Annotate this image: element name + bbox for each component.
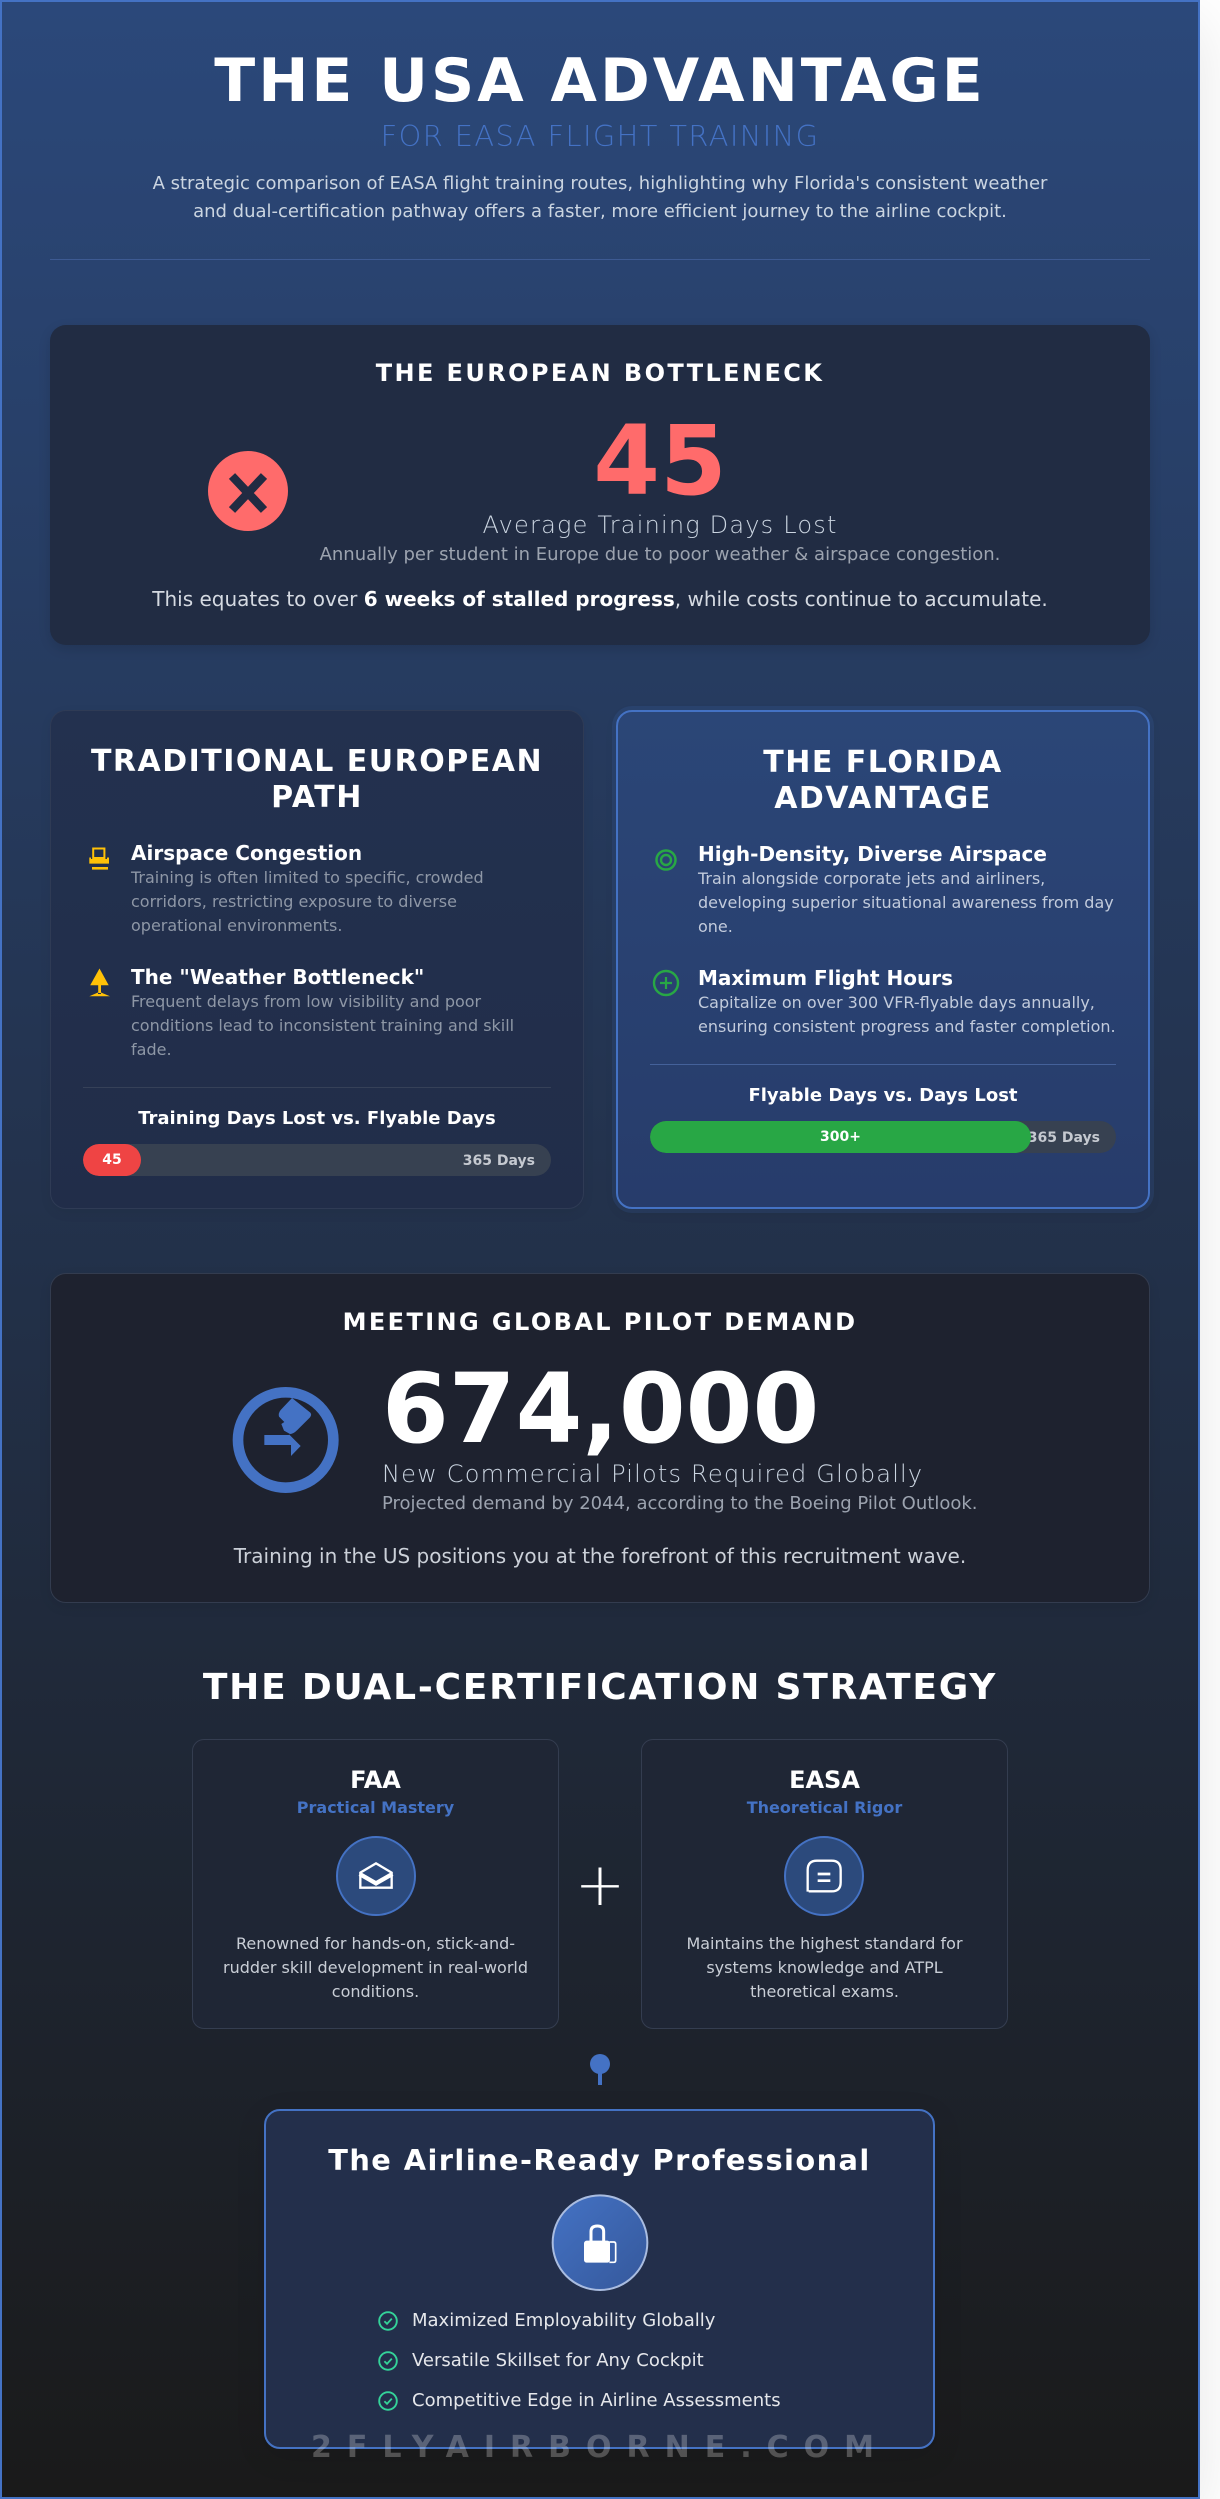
icon: airspace seat [89, 848, 109, 870]
panel heading: THE EUROPEAN BOTTLENECK [376, 359, 824, 387]
icon: document [784, 1836, 864, 1916]
icon: pilot compass [232, 1387, 339, 1493]
arrow: connector pin [590, 2054, 610, 2085]
bar fill 45 [83, 1144, 141, 1176]
days total label: 365 Days [1028, 1130, 1100, 1146]
stat note: Annually per student in Europe due to poor weather & airspace congestion. [320, 544, 1000, 565]
card text: Renowned for hands-on, stick-and- [236, 1934, 515, 1953]
card text: systems knowledge and ATPL [706, 1958, 943, 1977]
item: diverse airspace [698, 842, 1114, 936]
item heading: High-Density, Diverse Airspace [698, 842, 1047, 866]
icon: plus circle [652, 970, 680, 996]
item text: operational environments. [131, 916, 342, 935]
stat label: Average Training Days Lost [482, 511, 838, 539]
panel: faa [192, 1739, 559, 2029]
intro paragraph [152, 173, 1048, 222]
column heading [763, 745, 1003, 816]
item: weather bottleneck [131, 965, 514, 1059]
item text: Training is often limited to specific, crowded [131, 868, 484, 887]
item: airspace congestion [130, 841, 484, 935]
chart title: Training Days Lost vs. Flyable Days [138, 1108, 496, 1129]
item text: corridors, restricting exposure to diverse [131, 892, 457, 911]
column heading: ADVANTAGE [774, 781, 992, 816]
subtitle: FOR EASA FLIGHT TRAINING [381, 119, 819, 153]
panel: traditional european path [50, 710, 584, 1209]
item text: Capitalize on over 300 VFR-flyable days annually, [698, 993, 1095, 1012]
bar track [650, 1121, 1116, 1153]
days total label: 365 Days [463, 1153, 535, 1169]
item text: one. [698, 917, 733, 936]
icon: red x [208, 451, 288, 531]
icon: flight bag [552, 2194, 648, 2291]
section heading: dual certification: THE DUAL-CERTIFICATION STRATEGY [203, 1667, 997, 1708]
item heading: Maximum Flight Hours [698, 966, 953, 990]
bar fill 300+ [650, 1121, 1031, 1153]
card text [686, 1934, 963, 2001]
column heading [91, 744, 543, 815]
card text: conditions. [332, 1982, 419, 2001]
big stat 45: 45 [593, 405, 727, 517]
panel: easa [641, 1739, 1008, 2029]
takeaway: This equates to over 6 weeks of stalled progress, while costs continue to accumulate. [152, 587, 1048, 611]
intro paragraph: A strategic comparison of EASA flight training routes, highlighting why Florida's consistent weather [153, 173, 1047, 194]
card title: EASA [789, 1766, 860, 1794]
stat label: New Commercial Pilots Required Globally [382, 1460, 923, 1488]
chart title: Flyable Days vs. Days Lost [748, 1085, 1018, 1106]
column heading: PATH [271, 780, 363, 815]
icon: weather [90, 968, 110, 996]
item text [698, 869, 1114, 936]
panel: airline-ready professional [264, 2109, 935, 2449]
watermark: 2FLYAIRBORNE.COM [311, 2430, 889, 2465]
chart: days lost bar [83, 1108, 551, 1176]
card text: Maintains the highest standard for [686, 1934, 963, 1953]
header [152, 46, 1048, 222]
item text: developing superior situational awareness from day [698, 893, 1114, 912]
column heading: THE FLORIDA [763, 745, 1003, 780]
card subtitle: Practical Mastery [297, 1798, 454, 1817]
bar fill 45: 45 [102, 1152, 122, 1168]
panel: florida advantage [616, 710, 1150, 1209]
takeaway: Training in the US positions you at the forefront of this recruitment wave. [234, 1544, 966, 1568]
card subtitle: Theoretical Rigor [747, 1798, 902, 1817]
item text [130, 868, 484, 935]
item text: Frequent delays from low visibility and poor [131, 992, 481, 1011]
item heading: The "Weather Bottleneck" [131, 965, 424, 989]
item text: Train alongside corporate jets and airliners, [698, 869, 1045, 888]
item heading: Airspace Congestion [131, 841, 362, 865]
item: flight hours [698, 966, 1116, 1036]
item text [698, 993, 1116, 1036]
bar fill 300+: 300+ [820, 1129, 861, 1145]
intro paragraph: and dual-certification pathway offers a faster, more efficient journey to the airline cockpit. [193, 201, 1007, 222]
item text: ensuring consistent progress and faster completion. [698, 1017, 1116, 1036]
icon: target [655, 849, 677, 871]
item text: conditions lead to inconsistent training and skill [131, 1016, 514, 1035]
benefit 3: Competitive Edge in Airline Assessments [412, 2390, 781, 2411]
chart: flyable days bar [650, 1085, 1116, 1153]
item text [131, 992, 514, 1059]
panel: global pilot demand [50, 1273, 1150, 1603]
benefit 2: Versatile Skillset for Any Cockpit [412, 2350, 704, 2371]
bar track [83, 1144, 551, 1176]
item text: fade. [131, 1040, 172, 1059]
panel: european bottleneck [50, 325, 1150, 645]
card text: theoretical exams. [750, 1982, 899, 2001]
icon: envelope [336, 1836, 416, 1916]
benefit 1: Maximized Employability Globally [412, 2310, 715, 2331]
stat note: Projected demand by 2044, according to the Boeing Pilot Outlook. [382, 1493, 978, 1514]
card title: The Airline-Ready Professional [328, 2143, 871, 2177]
benefit list [378, 2310, 781, 2411]
card title: FAA [350, 1766, 401, 1794]
plus sign: + [575, 1850, 625, 1920]
big stat 674,000: 674,000 [382, 1353, 819, 1465]
column heading: TRADITIONAL EUROPEAN [91, 744, 543, 779]
card text [223, 1934, 528, 2001]
card text: rudder skill development in real-world [223, 1958, 528, 1977]
title: THE USA ADVANTAGE [214, 46, 986, 116]
panel heading: MEETING GLOBAL PILOT DEMAND [343, 1308, 857, 1336]
